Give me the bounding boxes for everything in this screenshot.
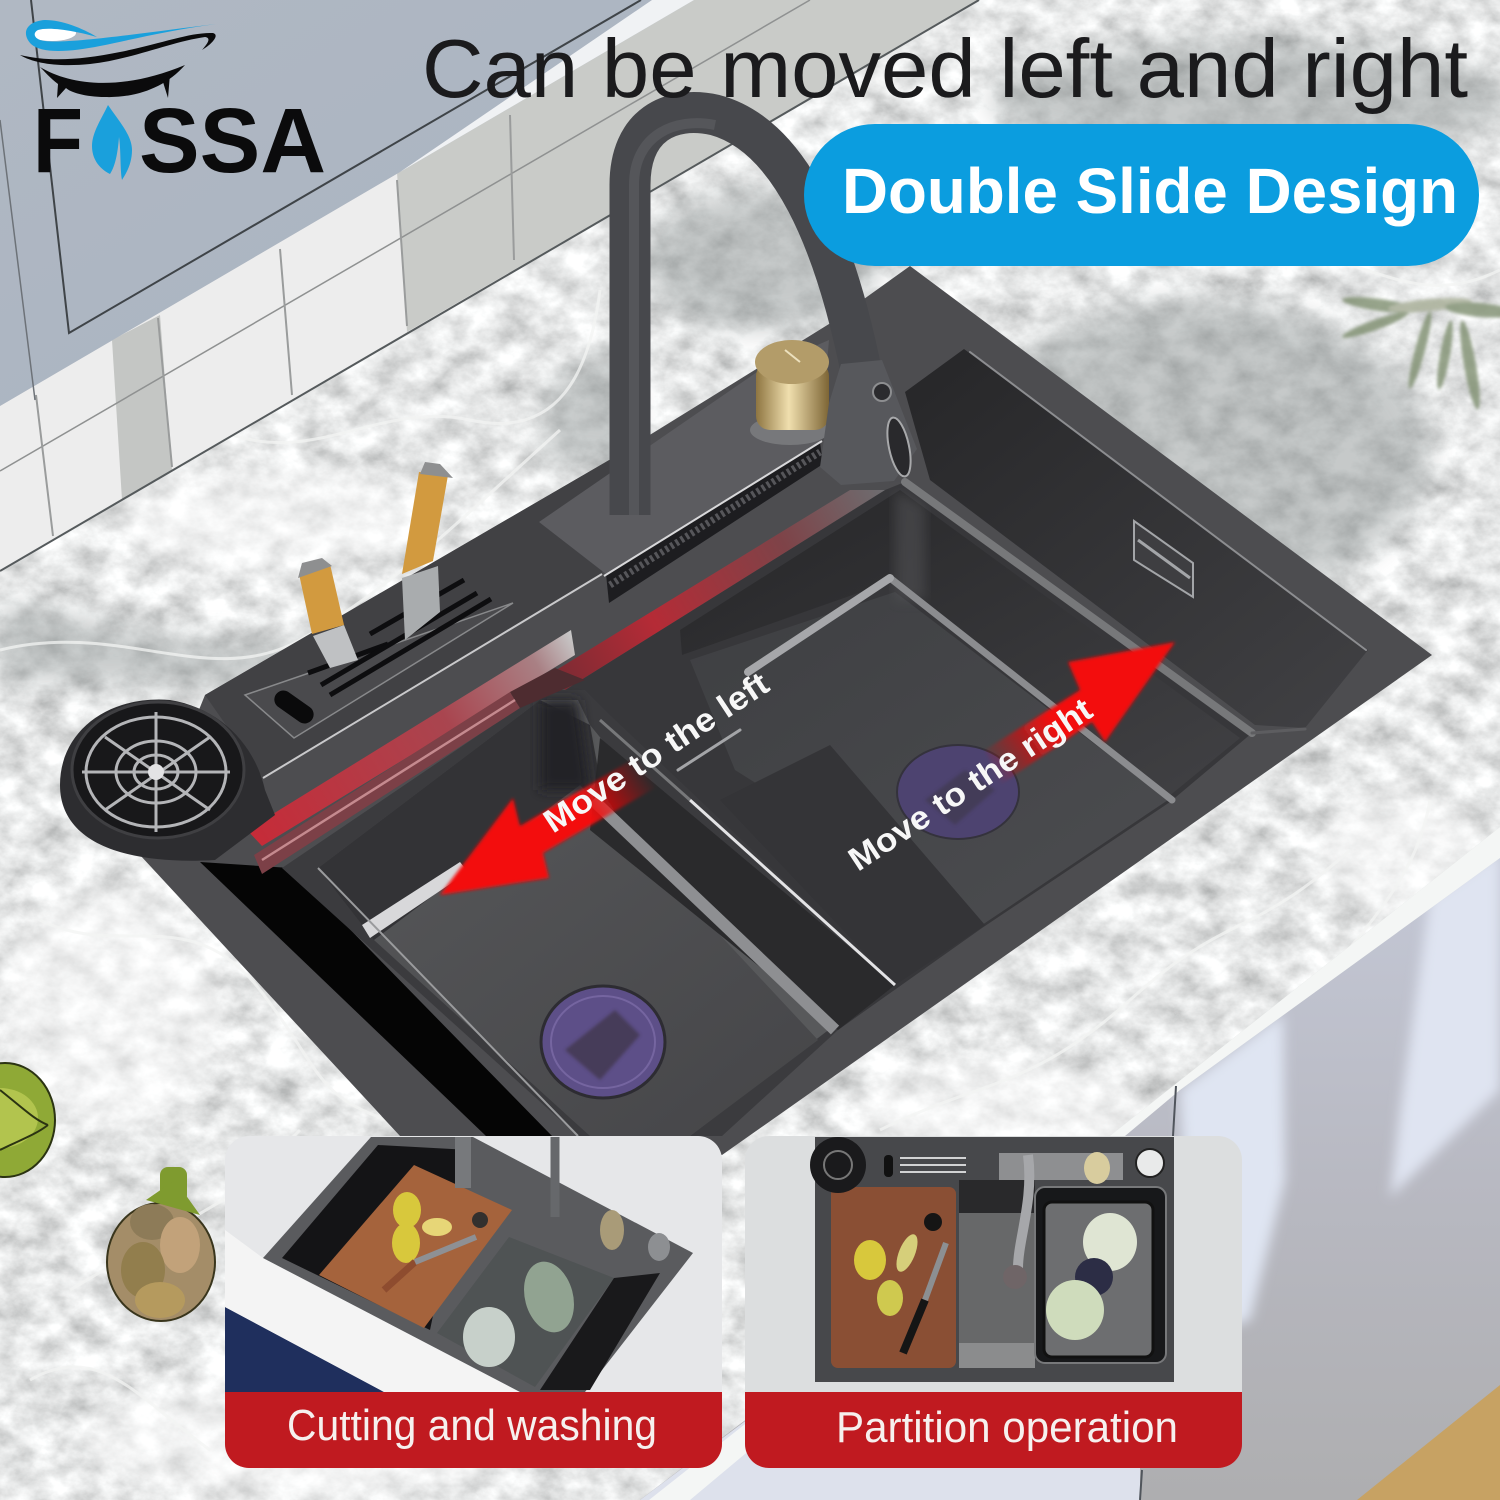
banner: Cutting and washing <box>287 1401 657 1450</box>
sink <box>60 113 1432 1155</box>
artichoke left edge <box>0 1063 55 1177</box>
logo: Fissa: F <box>33 90 83 192</box>
sink deck <box>140 266 1432 1155</box>
badge: double slide design: Double Slide Design <box>842 155 1458 227</box>
title: Can be moved left and right <box>422 22 1468 115</box>
overflow slot <box>1134 521 1193 597</box>
lower cabinet front <box>640 827 1500 1500</box>
banner: Partition operation <box>836 1403 1178 1452</box>
faucet <box>1018 1155 1029 1268</box>
wood floor <box>1357 1385 1500 1500</box>
faucet <box>630 113 917 515</box>
faucet <box>455 1137 471 1188</box>
arrow: move to the right: Move to the right <box>841 690 1099 878</box>
panel: partition operation <box>745 1136 1242 1468</box>
faucet control platform <box>539 340 829 603</box>
glass rinser <box>810 1137 866 1193</box>
banner <box>745 1392 1242 1468</box>
knife handles <box>298 462 453 668</box>
arrow: move to the left: Move to the left <box>536 664 775 840</box>
icon: bathtub <box>20 20 216 98</box>
right main basin <box>565 349 1368 1030</box>
arrow: move to the right <box>841 642 1175 878</box>
arrow: move to the left <box>440 664 775 895</box>
counter back edge line <box>0 0 979 571</box>
slot <box>271 687 317 727</box>
cutting board <box>831 1187 956 1368</box>
knife slots <box>900 1158 966 1172</box>
backsplash tiles <box>0 0 979 571</box>
banner <box>225 1392 722 1468</box>
cutting board <box>319 1165 512 1328</box>
left basin <box>282 690 895 1136</box>
glass rinser <box>60 700 275 861</box>
icon: right drain <box>897 745 1019 839</box>
icon: left drain <box>541 986 665 1098</box>
logo: Fissa <box>20 20 326 192</box>
icon: water drop <box>92 105 132 180</box>
plant decoration top right <box>1340 294 1500 410</box>
panel: cutting and washing <box>225 1136 722 1468</box>
artichoke <box>107 1167 215 1321</box>
colander <box>437 1237 614 1387</box>
colander tray <box>1035 1187 1166 1363</box>
upper cabinet <box>0 0 694 406</box>
badge: double slide design <box>804 124 1479 266</box>
knobs <box>600 1210 624 1250</box>
knife rack <box>205 459 611 778</box>
red slide rails <box>247 490 885 874</box>
gold knob <box>750 340 830 445</box>
black gap at front-left <box>200 862 552 1136</box>
logo: Fissa: SSA <box>139 90 326 192</box>
